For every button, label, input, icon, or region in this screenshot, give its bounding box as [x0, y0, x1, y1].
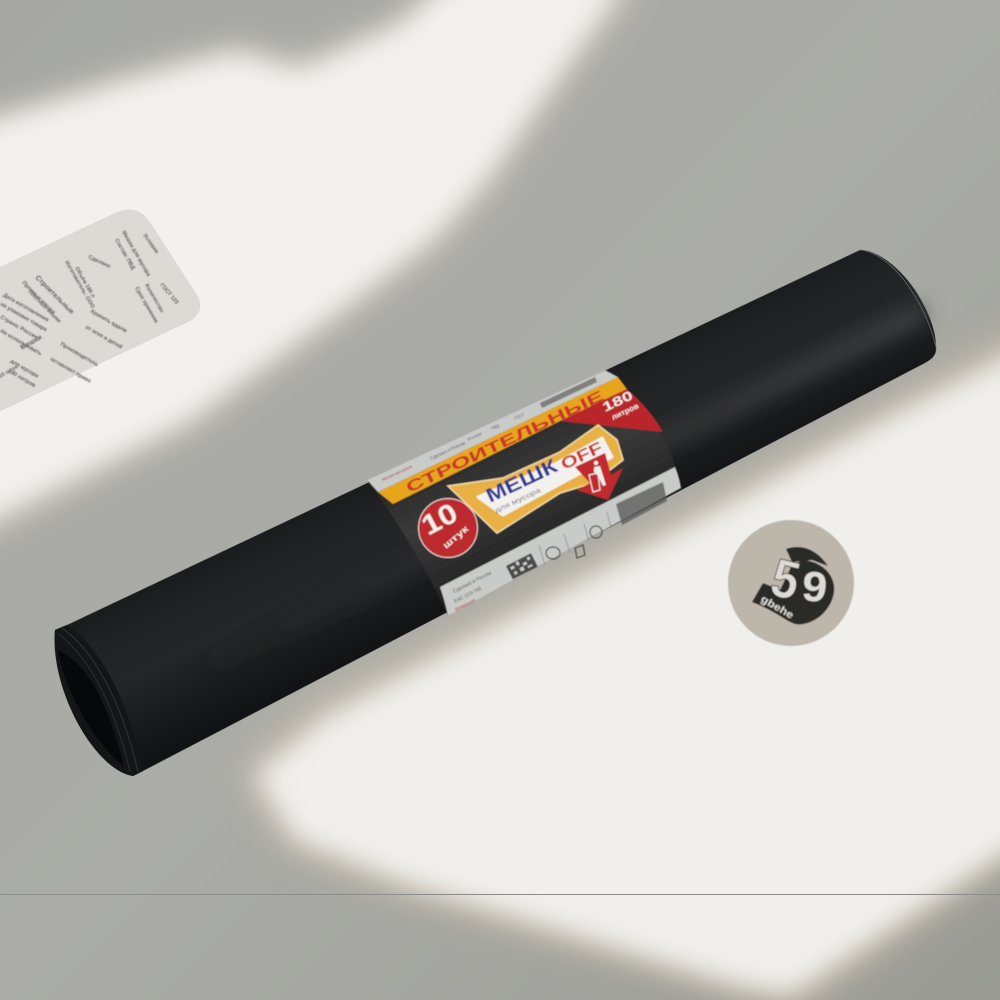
red badge: 10 pieces: штук	[441, 523, 471, 551]
horizon line	[0, 894, 1000, 895]
info card with small print: Мешки для мусора	[120, 230, 152, 278]
roll open end with layered wraps	[55, 625, 143, 776]
top silver strip: Условия	[466, 431, 482, 442]
icon: QR code	[506, 553, 538, 579]
info card with small print: Состав: ПВД	[113, 238, 136, 271]
logo mark 59: 5	[765, 547, 806, 612]
top silver strip: Мешки мусорные	[381, 463, 414, 482]
info card with small print: для мусора	[9, 359, 40, 380]
top silver strip: ПВД	[490, 423, 500, 431]
icon: recycling and bin symbols	[539, 512, 611, 565]
bottom silver strip: Сделано в России	[452, 570, 493, 595]
info card with small print: Строительные	[34, 274, 75, 316]
info card with small print: Плотные мешки	[27, 289, 62, 324]
right end rim	[860, 250, 936, 347]
info card with small print: оставляет право	[49, 357, 92, 385]
top silver strip	[367, 370, 618, 492]
logo mark 59: 9	[800, 562, 829, 611]
icon: red down arrow with bin figure	[575, 453, 623, 500]
brand logo: МЕШК	[483, 455, 562, 508]
logo mark 59: gbehe	[758, 593, 796, 622]
roll body	[55, 250, 936, 776]
info card with small print: от огня и детей	[84, 324, 124, 351]
red corner with volume	[560, 387, 663, 432]
info card with small print: Мешки	[20, 334, 43, 352]
top silver strip: Сделано в России	[429, 440, 466, 461]
red badge: 10 pieces	[416, 497, 478, 558]
red corner with volume: литров	[610, 401, 640, 422]
yellow band with heading	[378, 377, 627, 504]
brand logo	[448, 425, 623, 533]
label band	[367, 370, 681, 616]
info card with small print: Производитель	[59, 342, 100, 368]
red corner with volume: 180	[600, 387, 635, 415]
info card with small print: Изготовитель: ООО	[63, 260, 96, 310]
info card with small print: на упаковке товара	[0, 302, 49, 334]
info card with small print: Прочные мешки	[21, 280, 56, 316]
info card with small print: Хранить вдали	[89, 309, 128, 334]
brand logo: OFF	[558, 439, 606, 474]
light patch: upper left	[0, 0, 640, 545]
info card with small print: Условия	[141, 233, 159, 255]
bottom silver strip: Внимание!	[454, 597, 476, 612]
info card with small print: 180 литров	[7, 369, 37, 389]
barcode	[616, 482, 667, 525]
label base	[367, 370, 681, 616]
red badge: 10 pieces: 10	[416, 497, 463, 541]
info card with small print: Страна: Россия	[0, 315, 39, 341]
brand logo: для мусора	[494, 487, 542, 515]
bottom silver strip: ЕАС 123-768	[453, 586, 483, 605]
info card with small print: Количество	[143, 283, 165, 314]
yellow band with heading: СТРОИТЕЛЬНЫЕ	[403, 388, 606, 497]
sticker badge	[728, 520, 854, 646]
top silver strip: ГОСТ	[513, 412, 525, 421]
light patch: lower right	[245, 320, 1000, 1000]
info card with small print	[0, 210, 200, 440]
info card with small print: Сделано	[87, 254, 112, 270]
sheen streak	[170, 300, 925, 695]
info card with small print: Дата изготовления	[2, 293, 50, 323]
product: black bag roll	[55, 250, 936, 776]
logo mark 59	[752, 547, 834, 624]
bottom silver strip	[440, 467, 681, 616]
info card with small print: Срок хранения	[133, 286, 159, 324]
info card with small print: Объём 180 л	[73, 266, 97, 299]
info card with small print: Не использовать	[0, 329, 43, 357]
info card with small print: ГОСТ 123	[158, 282, 179, 306]
